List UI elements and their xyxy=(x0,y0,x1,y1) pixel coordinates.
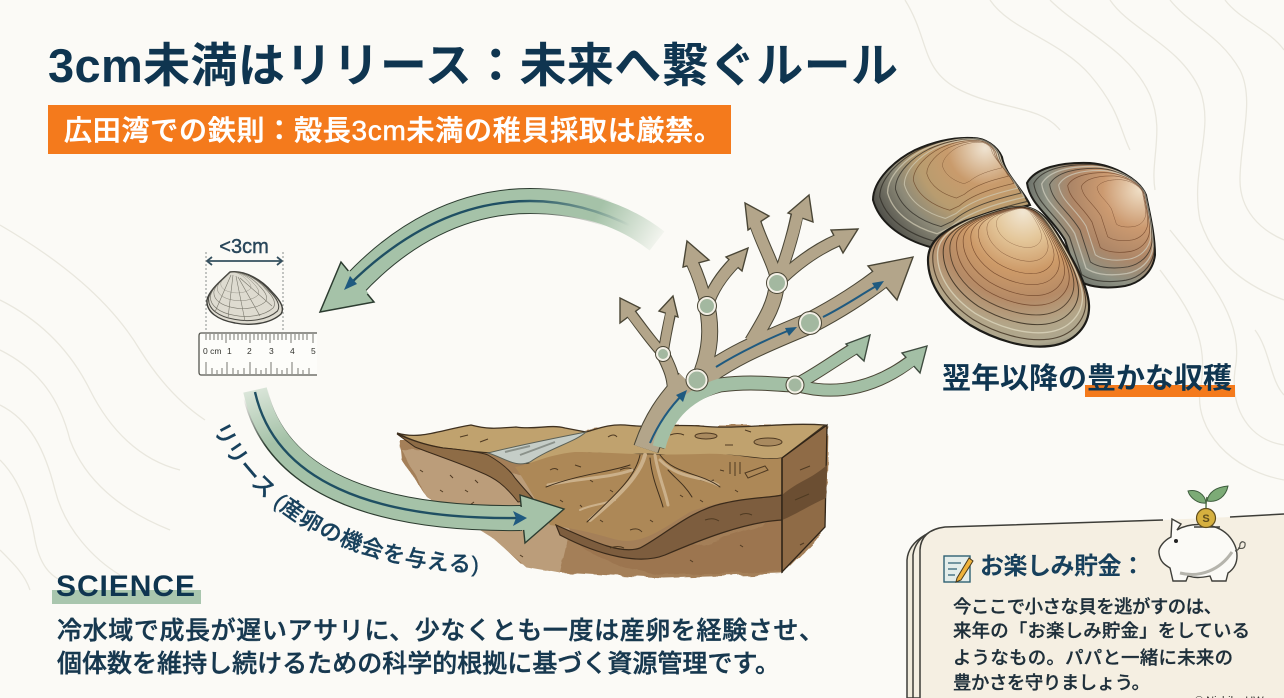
title: 3cm未満はリリース：未来へ繋ぐルール xyxy=(48,39,898,92)
clam front xyxy=(928,207,1089,347)
tide water channel xyxy=(488,432,586,464)
stacked paper pages xyxy=(907,514,1284,698)
soil watercolor body xyxy=(400,425,827,578)
roots xyxy=(548,455,718,520)
ruler xyxy=(199,333,317,375)
ruler: 5 xyxy=(311,346,316,356)
branch nodes xyxy=(657,274,820,392)
curved release label: リリース (産卵の機会を与える) xyxy=(216,424,478,576)
sprout xyxy=(1206,497,1207,508)
ruler: 1 xyxy=(227,346,232,356)
card body text: 来年の「お楽しみ貯金」をしている xyxy=(953,620,1250,641)
card body text: ようなもの。パパと一緒に未来の xyxy=(953,647,1233,668)
science section xyxy=(52,570,824,678)
illustration: three adult clams xyxy=(873,138,1155,347)
icon: memo and pencil xyxy=(944,556,973,582)
ruler: 2 xyxy=(247,346,252,356)
pig body xyxy=(1159,519,1237,581)
note card xyxy=(907,486,1284,698)
right side face xyxy=(782,425,827,572)
top surface xyxy=(397,424,825,464)
card body text: 今ここで小さな貝を逃がすのは、 xyxy=(953,596,1222,617)
front soil face xyxy=(515,452,782,541)
clam back left xyxy=(873,138,1030,247)
arrow heads tan xyxy=(620,195,913,323)
dark sediment band xyxy=(556,495,782,559)
icon: piggy bank with sprout coin xyxy=(1159,486,1245,581)
measure arrow xyxy=(206,252,283,331)
science body text: 冷水域で成長が遅いアサリに、少なくとも一度は産卵を経験させ、 xyxy=(57,617,824,645)
arrow: return to small clam xyxy=(320,201,657,312)
ruler: 4 xyxy=(290,346,295,356)
orange rule banner: 広田湾での鉄則：殻長3cm未満の稚貝採取は厳禁。 xyxy=(64,115,722,146)
arrow: release to the soil xyxy=(255,390,564,543)
coin xyxy=(1196,508,1216,528)
size label: <3cm xyxy=(219,236,269,258)
card body text: 豊かさを守りましょう。 xyxy=(953,672,1150,693)
ruler: 3 xyxy=(269,346,274,356)
branch fills xyxy=(628,213,888,449)
clam drawing xyxy=(207,272,282,324)
soil speckles xyxy=(420,430,810,562)
left slope layer xyxy=(397,434,534,502)
clam back right xyxy=(1027,163,1155,287)
flow arrows xyxy=(650,285,878,443)
icon: piggy bank with sprout coin: S xyxy=(1202,513,1210,525)
branching population tree xyxy=(620,195,927,449)
ruler: 0 cm xyxy=(203,346,221,356)
arrow heads green xyxy=(846,335,927,373)
harvest label with orange underline: 翌年以降の豊かな収穫 xyxy=(942,362,1232,395)
science heading: SCIENCE xyxy=(56,570,195,603)
science body text: 個体数を維持し続けるための科学的根拠に基づく資源管理です。 xyxy=(57,650,780,678)
soil cross-section block xyxy=(397,424,827,578)
orange rule banner xyxy=(48,105,731,154)
branch outlines xyxy=(630,215,912,449)
small clam with 3cm measure and ruler xyxy=(199,236,317,375)
card heading: お楽しみ貯金： xyxy=(980,553,1145,580)
